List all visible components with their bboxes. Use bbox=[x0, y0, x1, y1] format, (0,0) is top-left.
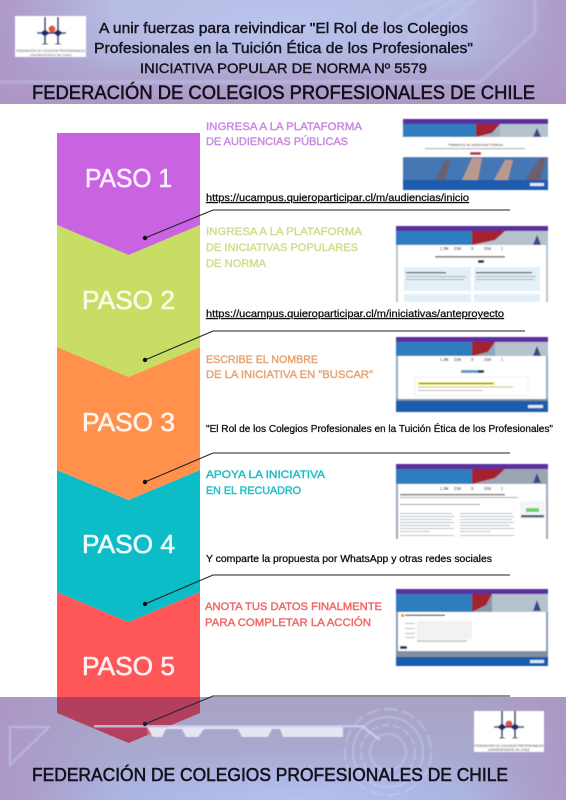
step 5 chevron bbox=[57, 592, 200, 743]
logo: top federation logo bbox=[15, 16, 86, 57]
screenshot: step 2 iniciativas page bbox=[396, 226, 548, 302]
screenshot: step 2 iniciativas page: 1.3K bbox=[440, 246, 449, 251]
step 1 link: https://ucampus.quieroparticipar.cl/m/audiencias/inicio bbox=[206, 192, 469, 204]
step 2 chevron: PASO 2 bbox=[82, 285, 175, 315]
step 2 link: https://ucampus.quieroparticipar.cl/m/iniciativas/anteproyecto bbox=[206, 308, 504, 320]
step 5 instruction: PARA COMPLETAR LA ACCIÓN bbox=[205, 616, 371, 629]
connector: step 5 bbox=[143, 696, 510, 726]
step 1 instruction: DE AUDIENCIAS PÚBLICAS bbox=[206, 135, 348, 148]
screenshot: step 3 search page: 1.3K bbox=[440, 357, 449, 362]
title text: A unir fuerzas para reivindicar "El Rol de los Colegios bbox=[99, 21, 468, 37]
screenshot: step 2 iniciativas page: 21K bbox=[454, 246, 462, 251]
footer band bbox=[0, 697, 566, 800]
step 1 chevron: PASO 1 bbox=[85, 163, 172, 193]
step 2 chevron bbox=[57, 225, 200, 377]
step 1 instruction: INGRESA A LA PLATAFORMA bbox=[206, 121, 363, 133]
title text: Profesionales en la Tuición Ética de los Profesionales" bbox=[94, 40, 473, 57]
connector: step 2 bbox=[143, 331, 525, 362]
screenshot: step 1 audiencias page bbox=[403, 119, 548, 190]
screenshot: step 3 search page: 21K bbox=[454, 357, 462, 362]
title text bbox=[94, 21, 473, 76]
screenshot: step 4 initiative detail page: 3 bbox=[471, 486, 474, 491]
step 2 instruction bbox=[206, 226, 363, 270]
connector: step 4 bbox=[143, 575, 510, 606]
step 5 instruction: ANOTA TUS DATOS FINALMENTE bbox=[205, 601, 382, 613]
screenshot: step 5 data form page bbox=[396, 589, 548, 666]
step 4 instruction: EN EL RECUADRO bbox=[206, 485, 301, 497]
step 3 instruction bbox=[206, 354, 373, 381]
logo: bottom federation logo bbox=[474, 711, 544, 752]
connector: step 1 bbox=[143, 210, 510, 240]
screenshot: step 4 initiative detail page: 21K bbox=[484, 486, 492, 491]
screenshot: step 3 search page bbox=[396, 337, 548, 412]
step 3 chevron: PASO 3 bbox=[82, 407, 175, 437]
step 4 chevron: PASO 4 bbox=[82, 529, 175, 559]
header band bbox=[0, 0, 566, 104]
screenshot: step 3 search page: 3 bbox=[471, 357, 474, 362]
screenshot: step 2 iniciativas page: 3 bbox=[471, 246, 474, 251]
step 2 instruction: DE NORMA bbox=[206, 258, 267, 270]
screenshot: step 2 iniciativas page: 1 bbox=[501, 246, 504, 251]
screenshot: step 3 search page: 1 bbox=[501, 357, 504, 362]
screenshot: step 4 initiative detail page: 1.3K bbox=[440, 486, 449, 491]
screenshot: step 1 audiencias page: Plataforma de audiencias Públicas bbox=[448, 143, 503, 147]
step 4 chevron bbox=[57, 470, 200, 622]
step 3 instruction: DE LA INICIATIVA EN "BUSCAR" bbox=[206, 369, 373, 381]
heading: federation name bottom: FEDERACIÓN DE COLEGIOS PROFESIONALES DE CHILE bbox=[32, 764, 508, 785]
step 4 instruction bbox=[206, 469, 326, 497]
step 5 instruction bbox=[205, 601, 382, 629]
logo: bottom federation logo: FEDERACIÓN DE COLEGIOS PROFESIONALES bbox=[474, 743, 544, 748]
screenshot: step 4 initiative detail page bbox=[396, 464, 548, 539]
step 4 share note: Y comparte la propuesta por WhatsApp y otras redes sociales bbox=[206, 554, 492, 565]
title text: INICIATIVA POPULAR DE NORMA Nº 5579 bbox=[140, 60, 427, 76]
step 3 initiative name: "El Rol de los Colegios Profesionales en la Tuición Ética de los Profesionales" bbox=[206, 422, 553, 435]
step 1 chevron bbox=[57, 133, 200, 255]
screenshot: step 4 initiative detail page: 21K bbox=[454, 486, 462, 491]
step 1 instruction bbox=[206, 121, 363, 148]
logo: top federation logo: UNIVERSITARIOS DE CHILE bbox=[30, 53, 72, 57]
heading: federation name top: FEDERACIÓN DE COLEGIOS PROFESIONALES DE CHILE bbox=[32, 81, 535, 104]
step 5 chevron: PASO 5 bbox=[82, 651, 175, 681]
step 3 chevron bbox=[57, 347, 200, 500]
screenshot: step 4 initiative detail page: 1 bbox=[501, 486, 504, 491]
screenshot: step 3 search page: 21K bbox=[484, 357, 492, 362]
logo: bottom federation logo: UNIVERSITARIOS DE CHILE bbox=[488, 748, 530, 752]
step 2 instruction: DE INICIATIVAS POPULARES bbox=[206, 242, 358, 254]
step 2 instruction: INGRESA A LA PLATAFORMA bbox=[206, 226, 363, 238]
screenshot: step 2 iniciativas page: 21K bbox=[484, 246, 492, 251]
logo: top federation logo: FEDERACIÓN DE COLEGIOS PROFESIONALES bbox=[16, 48, 85, 53]
step 4 instruction: APOYA LA INICIATIVA bbox=[206, 469, 326, 481]
connector: step 3 bbox=[143, 453, 510, 484]
step 3 instruction: ESCRIBE EL NOMBRE bbox=[206, 354, 318, 366]
